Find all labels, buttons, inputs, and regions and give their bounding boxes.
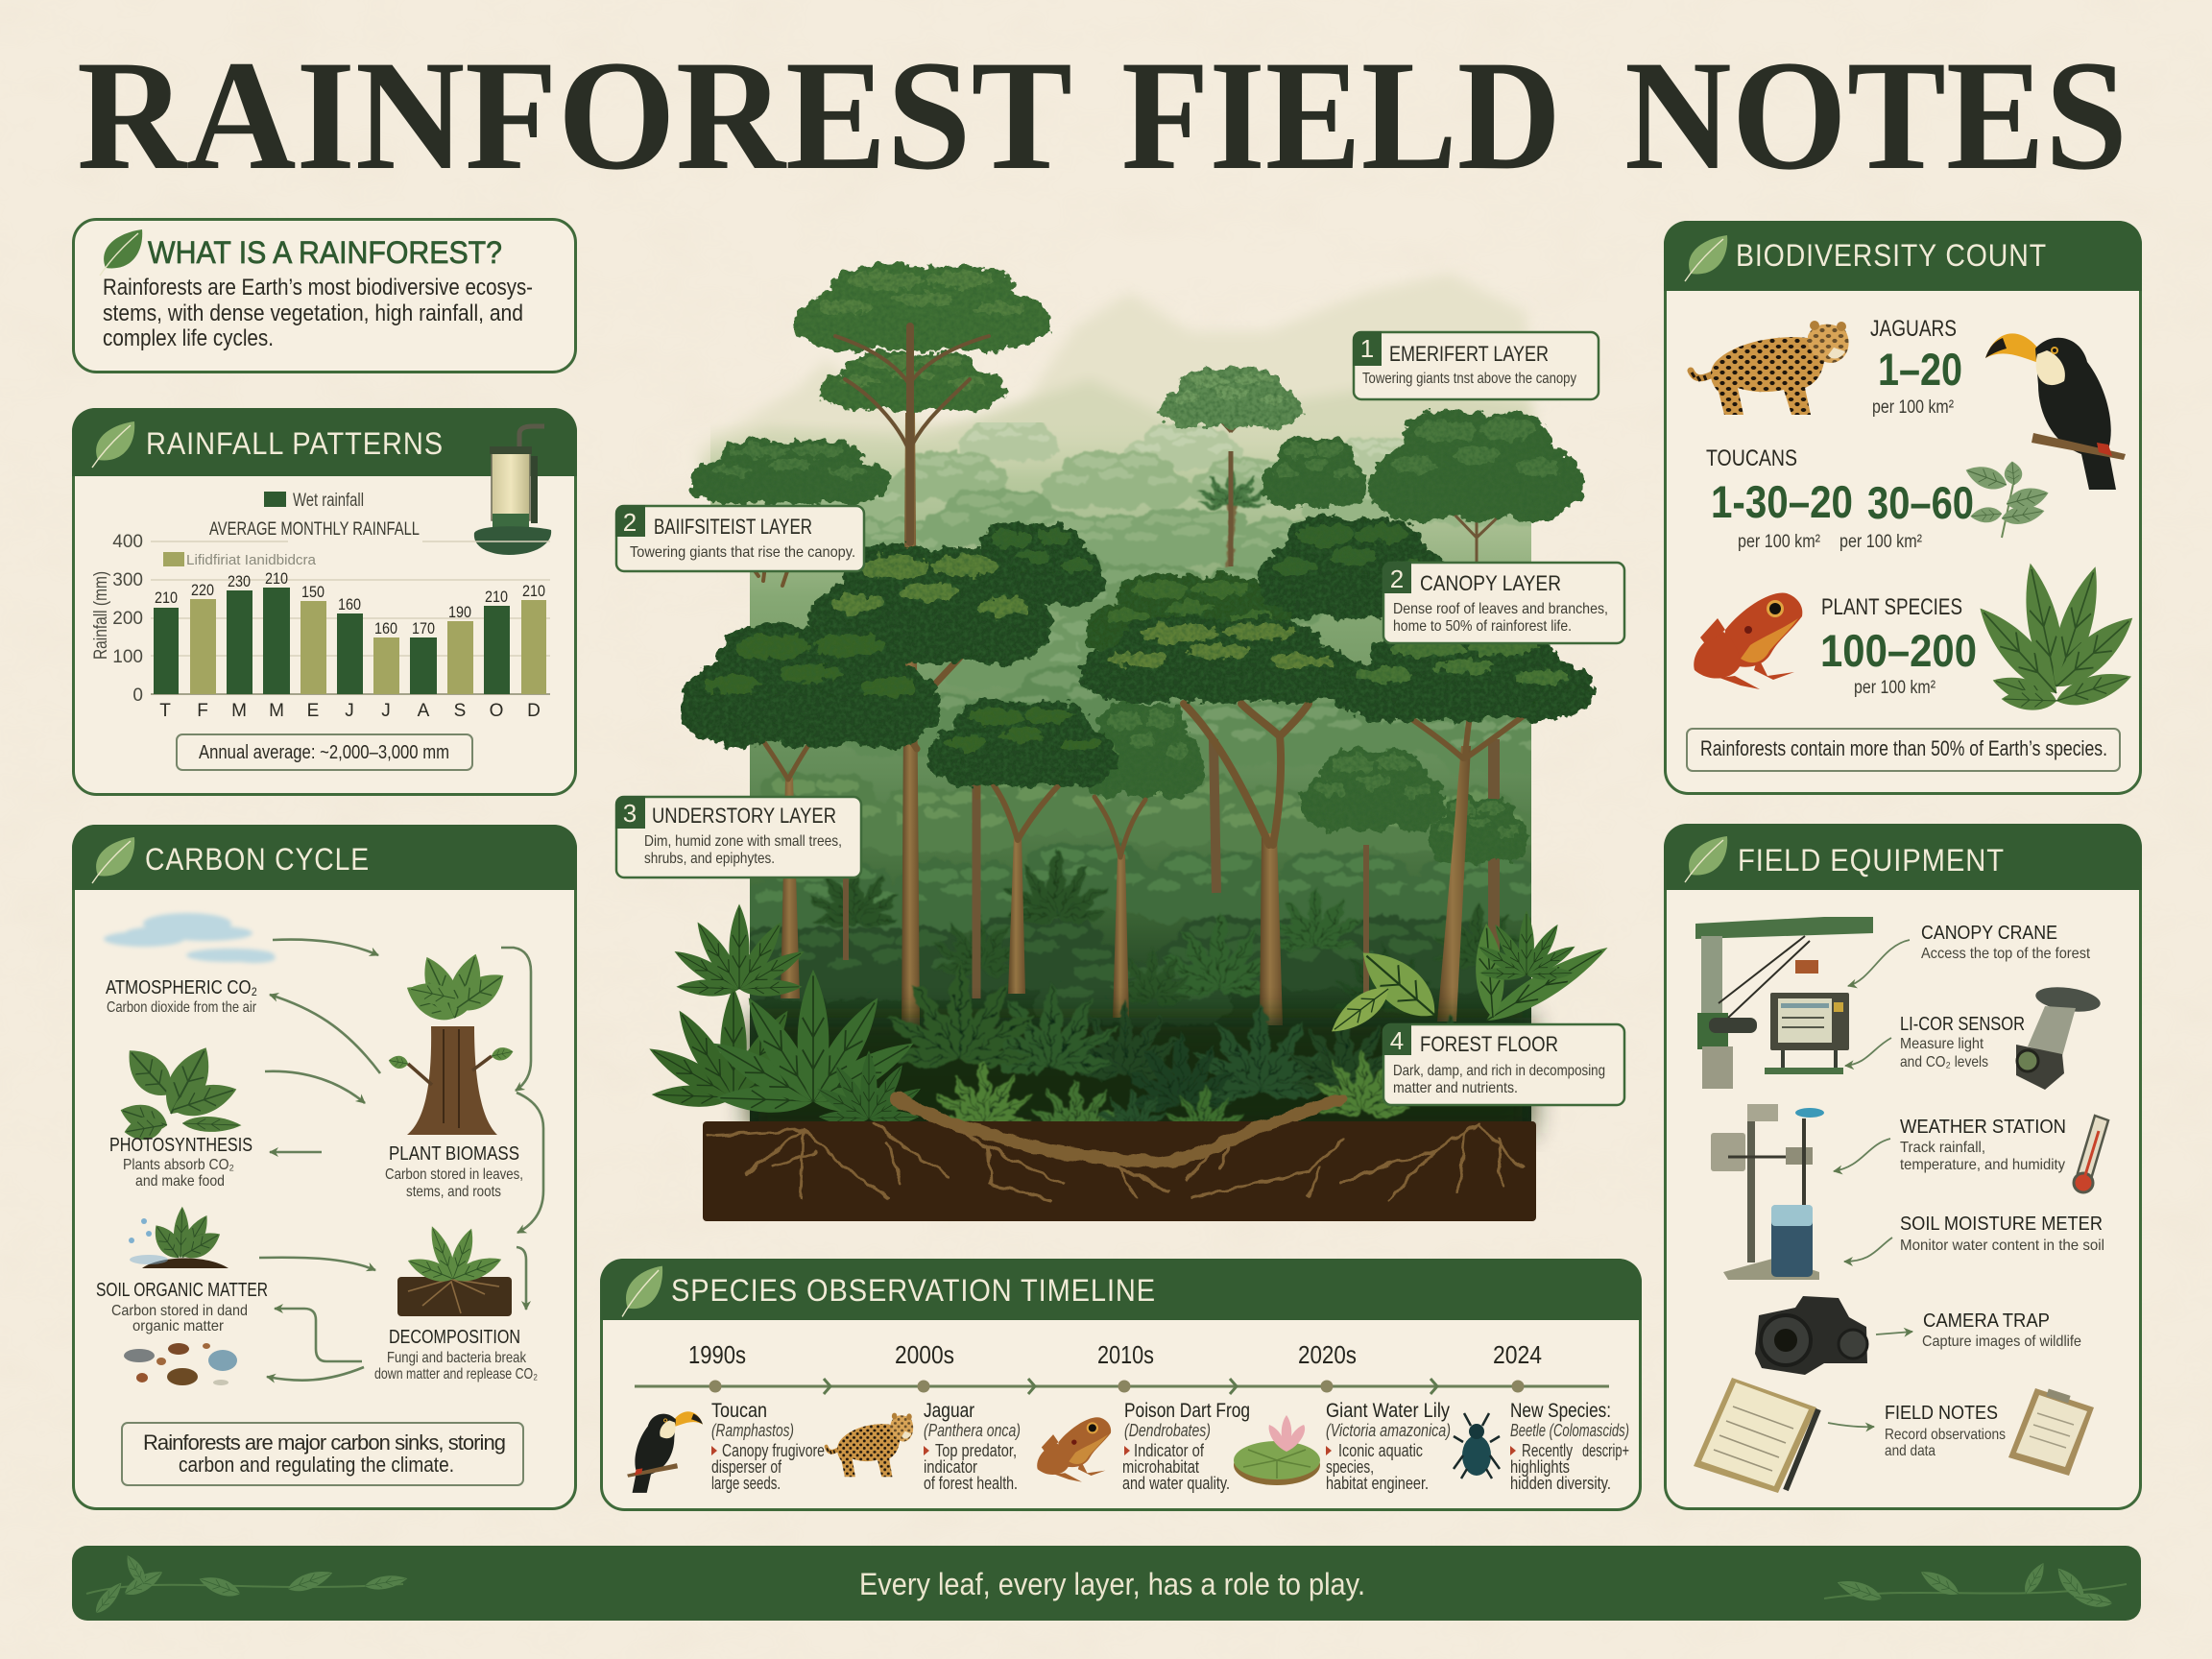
stat: toucans: 30–60 [1867,477,1974,528]
entry: poison dart frog [1122,1400,1250,1493]
panel: rainfall patterns [72,408,577,795]
label: field notes [1885,1403,2006,1459]
entry: poison dart frog: and water quality. [1122,1474,1230,1493]
bar chart: J [345,701,354,721]
label: weather station [1900,1117,2066,1173]
bar chart: 190 [448,603,471,621]
body text: stems, with dense vegetation, high rainfall, and [103,301,523,326]
callout: rainforest layer: 2 [623,508,637,537]
bar chart: 210 [155,589,178,607]
entry: giant water lily: (Victoria amazonica) [1326,1421,1451,1440]
entry: toucan [711,1400,825,1493]
entry: new species [1510,1400,1629,1493]
bar chart: M [269,701,284,721]
bar chart: O [490,701,503,721]
node: photosynthesis: Plants absorb CO₂ [123,1157,234,1173]
stat: jaguars: 1–20 [1878,344,1962,395]
footer foliage right [1824,1560,2127,1609]
misty mountains [691,274,1536,499]
stat: jaguars: JAGUARS [1870,316,1957,342]
stat: plant species: 100–200 [1820,625,1977,676]
node: photosynthesis [109,1135,252,1190]
entry: poison dart frog: Indicator of [1134,1441,1205,1460]
icon: field notebook [1694,1378,1818,1493]
icon: canopy crane [1695,917,1873,1089]
label: soil moisture meter [1900,1214,2104,1254]
node: plant biomass [385,1143,523,1200]
icon: leafy sprig [1962,461,2051,538]
bar chart: M [231,701,247,721]
entry: jaguar: indicator [924,1457,977,1477]
callout: emergent layer: 1 [1360,334,1374,363]
entry: poison dart frog: microhabitat [1122,1457,1199,1477]
footer banner [72,1546,2141,1621]
icon: rain gauge [474,426,551,555]
node: plant biomass: PLANT BIOMASS [389,1143,519,1165]
entry: toucan: large seeds. [711,1474,781,1493]
bar chart: 0 [132,685,143,706]
palm and understory fronds [806,471,1527,1014]
node: plant biomass: Carbon stored in leaves, [385,1166,523,1183]
label: canopy crane: CANOPY CRANE [1921,923,2057,944]
bar chart: 160 [374,619,397,637]
label: camera trap [1922,1310,2081,1350]
callout: canopy layer: home to 50% of rainforest life. [1393,618,1572,635]
label: soil moisture meter: SOIL MOISTURE METER [1900,1214,2103,1235]
stat: toucans [1706,445,1974,552]
tagline: Every leaf, every layer, has a role to play. [859,1567,1365,1601]
body text: Rainforests are Earth’s most biodiversive ecosys- [103,275,533,301]
timeline axis [635,1379,1609,1394]
chart title: AVERAGE MONTHLY RAINFALL [209,519,420,540]
chart legend [163,491,364,568]
heading: what is a rainforest: WHAT IS A RAINFOREST? [148,235,502,270]
label: field notes: Record observations [1885,1427,2006,1443]
entry: toucan: Toucan [711,1400,767,1422]
callout: forest floor: Dark, damp, and rich in decomposing [1393,1063,1605,1079]
year labels: 1990s [688,1340,746,1369]
icon: frog small [1037,1417,1111,1482]
icon: jaguar [1691,321,1849,415]
callout: rainforest layer: BAIIFSITEIST LAYER [654,515,812,539]
entry: new species: hidden diversity. [1510,1474,1611,1493]
icon: frog [1694,592,1802,689]
panel: species observation timeline [600,1259,1642,1509]
bar chart: E [307,701,319,721]
node: decomposition [374,1327,538,1382]
label: li-cor sensor: and CO₂ levels [1900,1054,1988,1070]
icon: leaf [100,229,142,276]
entry: new species: descrip+ [1582,1441,1629,1460]
callout: emergent layer: Towering giants tnst above the canopy [1362,371,1576,387]
arrows: carbon flows [259,940,543,1381]
near-ground plants [880,961,1515,1142]
icon: tree biomass [388,950,515,1135]
entry: jaguar: Top predator, [935,1441,1017,1460]
label: field notes: FIELD NOTES [1885,1403,1998,1424]
callout: canopy layer: 2 [1390,565,1404,593]
entry: toucan: disperser of [711,1457,782,1477]
heading: field equipment: FIELD EQUIPMENT [1738,843,2005,878]
callout: understory layer: 3 [623,799,637,828]
bar chart: Rainfall (mm) [91,571,111,660]
callout: understory layer: UNDERSTORY LAYER [652,804,836,828]
icon: photosynthesis plant [117,1040,242,1143]
year labels: 2020s [1298,1340,1357,1369]
node: decomposition: DECOMPOSITION [389,1327,520,1348]
heading: carbon cycle: CARBON CYCLE [145,842,370,877]
entry: giant water lily: Iconic aquatic [1338,1441,1423,1460]
background tree rows [709,415,1558,1026]
bar chart: 160 [338,595,361,613]
stat: plant species: per 100 km² [1854,678,1936,698]
label: li-cor sensor [1900,1014,2025,1070]
panel: biodiversity count [1664,221,2143,793]
callout: emergent layer [1353,331,1599,399]
bar chart: 150 [301,583,325,601]
mid-distance trunks [846,403,1527,998]
callout: forest floor [1382,1023,1624,1105]
year labels [688,1340,1542,1369]
entry: jaguar [924,1400,1021,1493]
callout: carbon sinks [122,1423,523,1485]
callout: rainforest layer [615,505,864,571]
callout: carbon sinks: carbon and regulating the climate. [179,1453,454,1477]
title: RAINFOREST [77,29,1072,203]
main trunks and branches [706,413,1534,1027]
node: decomposition: down matter and replease CO₂ [374,1366,538,1382]
icon: leaf [1685,235,1727,281]
callout: carbon sinks: Rainforests are major carbon sinks, storing [143,1431,506,1455]
icon: leaf [622,1266,662,1316]
icon: leaf [1685,836,1727,882]
label: canopy crane [1921,923,2090,962]
stat: jaguars [1870,316,1962,418]
entry: jaguar: of forest health. [924,1474,1018,1493]
callout: forest floor: matter and nutrients. [1393,1080,1518,1096]
icon: li-cor sensor [2016,983,2102,1090]
title: FIELD [1121,29,1561,203]
icon: water lily [1234,1415,1320,1485]
node: atmospheric CO2: Carbon dioxide from the air [107,999,257,1016]
node: atmospheric CO2: ATMOSPHERIC CO₂ [106,977,257,998]
entry: toucan: Canopy frugivore [722,1441,825,1460]
node: soil organic matter [96,1280,268,1334]
chart legend: Lifidfiriat Ianidbidcra [186,552,317,568]
icon: soil rocks [124,1343,237,1385]
heading: species observation timeline: SPECIES OBSERVATION TIMELINE [671,1273,1156,1308]
bar chart: S [454,701,466,721]
callout: canopy layer [1382,562,1624,643]
callout: understory layer [615,796,861,878]
callout: understory layer: Dim, humid zone with small trees, [644,833,842,850]
bar chart: T [159,701,171,721]
callout: emergent layer: EMERIFERT LAYER [1389,342,1549,366]
entry: giant water lily: habitat engineer. [1326,1474,1429,1493]
entry: toucan: (Ramphastos) [711,1421,794,1440]
entry: giant water lily: Giant Water Lily [1326,1400,1450,1422]
entry: jaguar: Jaguar [924,1400,974,1422]
entry: new species: Recently [1522,1441,1573,1460]
body text: complex life cycles. [103,325,274,351]
understory shadow [750,1018,1531,1133]
panel: carbon cycle [72,825,577,1509]
callout: canopy layer: CANOPY LAYER [1420,571,1561,595]
icon: broadleaf plant [1968,560,2143,713]
label: weather station: WEATHER STATION [1900,1117,2066,1138]
callout: understory layer: shrubs, and epiphytes. [644,851,775,867]
upper and mid canopy crowns [690,368,1581,863]
bar chart: 210 [522,582,545,600]
icon: toucan small [627,1411,703,1493]
entry: poison dart frog: (Dendrobates) [1124,1421,1211,1440]
title: NOTES [1624,29,2128,203]
entry: new species: Beetle (Colomascids) [1510,1421,1629,1440]
illustration: rainforest cross-section [643,263,1614,1221]
soil block [703,1121,1536,1221]
label: li-cor sensor: Measure light [1900,1036,1984,1052]
node: photosynthesis: and make food [135,1173,225,1190]
node: soil organic matter: Carbon stored in dand [111,1303,248,1319]
front canopy crowns [681,543,1594,787]
icon: toucan [1985,333,2126,490]
entry: poison dart frog: Poison Dart Frog [1124,1400,1250,1422]
foreground leaves [643,903,1614,1125]
footer foliage left [86,1552,409,1617]
icon: beetle [1454,1413,1500,1479]
label: soil moisture meter: Monitor water content in the soil [1900,1238,2104,1254]
year labels: 2024 [1493,1340,1542,1369]
node: soil organic matter: organic matter [132,1318,225,1334]
bar chart: 210 [265,569,288,588]
node: soil organic matter: SOIL ORGANIC MATTER [96,1280,268,1301]
label: canopy crane: Access the top of the forest [1921,946,2090,962]
stat: plant species [1820,594,1977,698]
bar chart: 100 [112,647,143,667]
entry: new species: highlights [1510,1457,1570,1477]
label: weather station: temperature, and humidity [1900,1157,2065,1173]
icon: jaguar small [827,1413,913,1477]
year labels: 2000s [895,1340,954,1369]
chart legend: Wet rainfall [293,491,364,511]
roots [709,1099,1523,1200]
bar chart: D [527,701,541,721]
icon: leaf [92,837,134,883]
node: plant biomass: stems, and roots [406,1184,501,1200]
callout: annual average [177,734,472,770]
stat: toucans: per 100 km² [1738,532,1820,552]
bar chart: 400 [112,532,143,552]
node: decomposition: Fungi and bacteria break [387,1350,527,1366]
callout: species share [1687,729,2120,771]
node: photosynthesis: PHOTOSYNTHESIS [109,1135,252,1156]
heading: rainfall patterns: RAINFALL PATTERNS [146,426,444,461]
bar chart: A [418,701,430,721]
icon: cloud [104,913,276,963]
entry: jaguar: (Panthera onca) [924,1421,1021,1440]
label: camera trap: Capture images of wildlife [1922,1334,2081,1350]
callout: annual average: Annual average: ~2,000–3,000 mm [199,742,449,763]
icon: weather station [1711,1104,1824,1280]
icon: decomposing soil [397,1223,512,1316]
label: field notes: and data [1885,1443,1936,1459]
stat: plant species: PLANT SPECIES [1821,594,1962,620]
heading: biodiversity count: BIODIVERSITY COUNT [1736,238,2047,273]
icon: camera trap [1755,1296,1867,1375]
bar chart: 210 [485,588,508,606]
bar chart: 230 [228,572,251,590]
callout: forest floor: FOREST FLOOR [1420,1032,1558,1056]
stat: toucans: per 100 km² [1839,532,1922,552]
body text [103,275,533,351]
stat: jaguars: per 100 km² [1872,397,1954,418]
label: camera trap: CAMERA TRAP [1923,1310,2050,1332]
entry: new species: New Species: [1510,1400,1611,1422]
node: atmospheric CO2 [106,977,257,1016]
bar chart: 220 [191,581,214,599]
entry: giant water lily: species, [1326,1457,1374,1477]
bar chart: 200 [112,609,143,629]
label: weather station: Track rainfall, [1900,1140,1985,1156]
bar chart: F [197,701,208,721]
bar chart: 170 [412,619,435,637]
bar chart: 300 [112,570,143,590]
icon: thermometer [2074,1116,2108,1192]
icon: leaf [92,421,134,468]
callout: canopy layer: Dense roof of leaves and branches, [1393,601,1608,617]
title [77,29,2128,203]
stat: toucans: 1-30–20 [1711,476,1853,527]
arrows: equipment leaders [1828,940,1912,1427]
icon: clipboard [2008,1388,2094,1476]
callout: species share: Rainforests contain more than 50% of Earth’s species. [1700,736,2107,760]
label: li-cor sensor: LI-COR SENSOR [1900,1014,2025,1035]
callout: rainforest layer: Towering giants that rise the canopy. [630,544,855,561]
year labels: 2010s [1097,1340,1154,1369]
panel: what is a rainforest [73,219,576,373]
entry: giant water lily [1326,1400,1451,1493]
stat: toucans: TOUCANS [1706,445,1797,471]
bar chart: J [381,701,391,721]
forest backdrop [710,422,1531,1123]
panel: field equipment [1664,824,2142,1509]
bar chart [91,532,550,721]
emergent tree [794,263,1049,542]
icon: soil sprout [129,1206,228,1268]
callout: forest floor: 4 [1390,1026,1404,1055]
